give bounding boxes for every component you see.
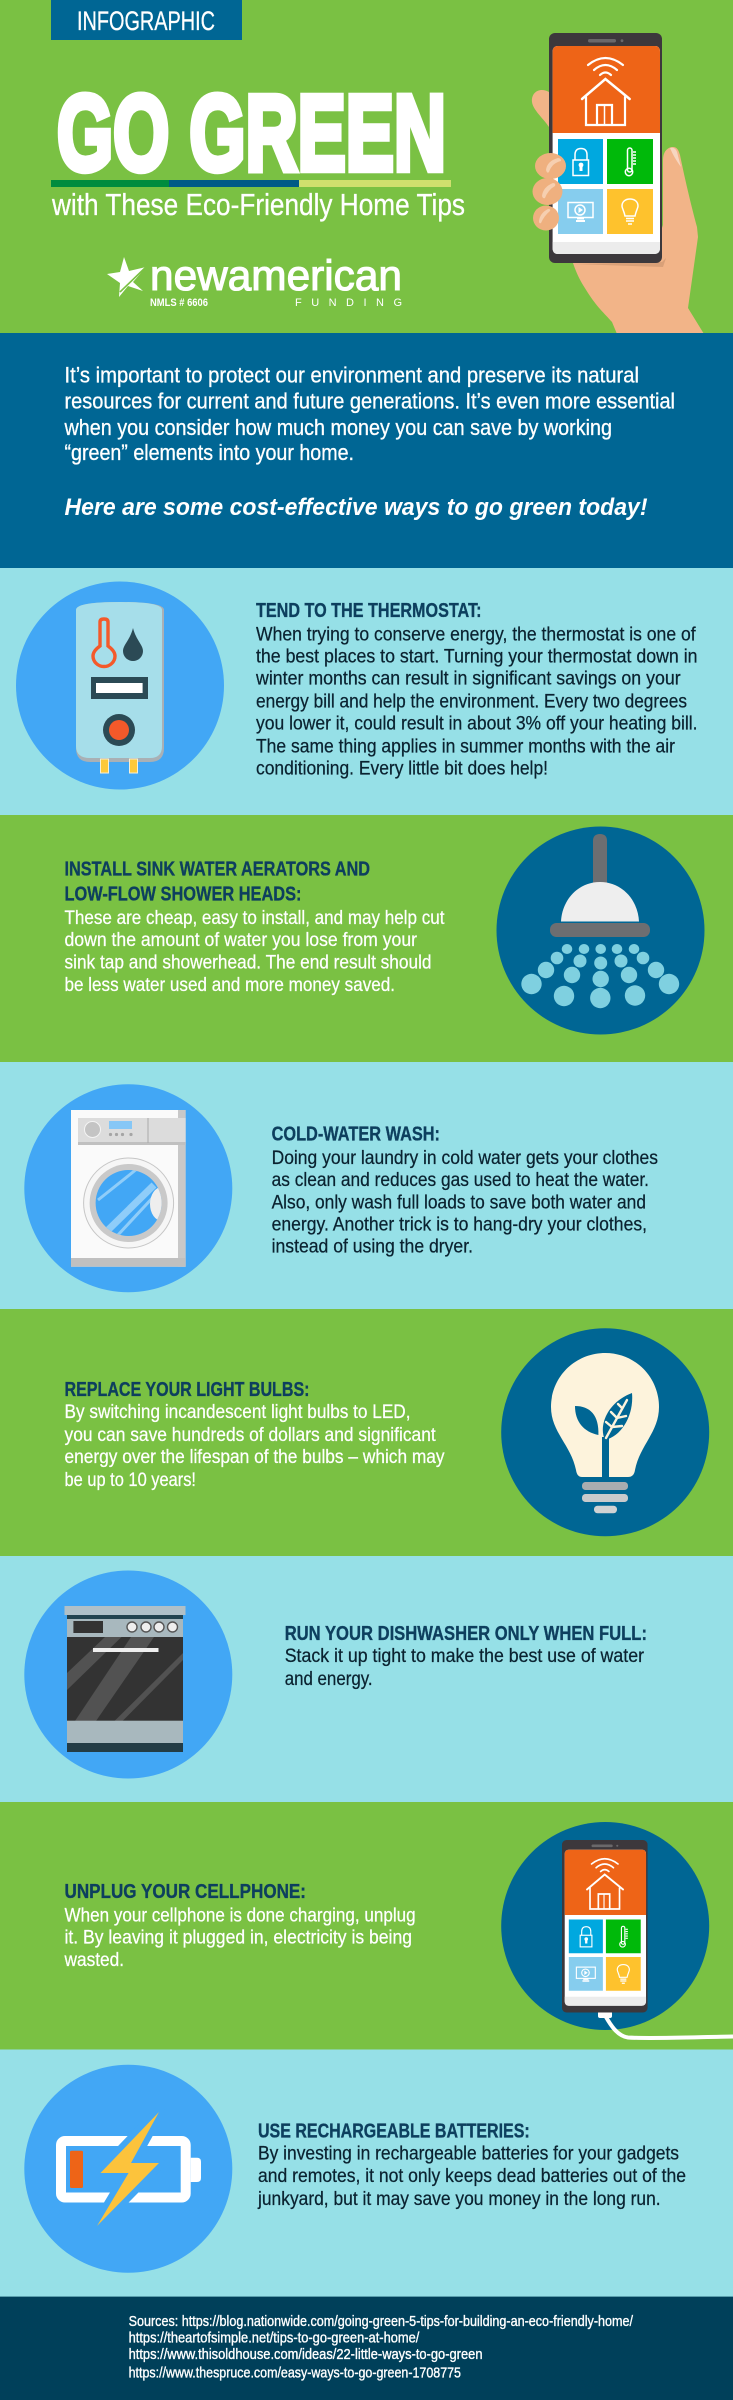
heading	[64, 858, 370, 906]
panel: dishwasher	[0, 1556, 733, 1802]
phone	[549, 33, 662, 263]
panel: sources footer	[0, 2297, 733, 2400]
body text	[272, 1147, 658, 1258]
icon: shower head	[496, 826, 704, 1034]
body text: be up to 10 years!	[64, 1469, 196, 1491]
panel: rechargeable batteries	[0, 2050, 733, 2297]
body text: wasted.	[64, 1949, 124, 1971]
body text: conditioning. Every little bit does help!	[256, 758, 548, 780]
sources text: https://www.thespruce.com/easy-ways-to-go-green-1708775	[129, 2366, 461, 2382]
sources text: Sources: https://blog.nationwide.com/going-green-5-tips-for-building-an-eco-friendly-home/	[129, 2314, 634, 2330]
icon: washing machine	[24, 1084, 232, 1292]
intro text	[64, 363, 675, 465]
intro text: when you consider how much money you can save by working	[64, 415, 612, 440]
body text: energy bill and help the environment. Every two degrees	[256, 691, 687, 713]
intro text: It’s important to protect our environment and preserve its natural	[64, 363, 639, 388]
body text: instead of using the dryer.	[272, 1236, 473, 1258]
body text: and energy.	[285, 1668, 373, 1690]
panel: light bulbs	[0, 1309, 733, 1556]
body text: down the amount of water you lose from your	[64, 929, 417, 951]
icon: water heater thermostat	[16, 582, 224, 790]
sources text: https://www.thisoldhouse.com/ideas/22-little-ways-to-go-green	[129, 2347, 482, 2363]
icon: charging battery	[24, 2065, 232, 2273]
subtitle: with These Eco-Friendly Home Tips	[51, 187, 465, 222]
heading: COLD-WATER WASH:	[272, 1123, 440, 1146]
title underline	[51, 180, 451, 187]
tag: infographic	[51, 0, 242, 40]
panel: cold-water wash	[0, 1062, 733, 1309]
icon: hand holding phone	[532, 33, 704, 334]
intro text: resources for current and future generations. It’s even more essential	[64, 389, 675, 414]
body text	[257, 2143, 686, 2210]
body text: it. By leaving it plugged in, electricity is being	[64, 1927, 412, 1949]
body text	[64, 1401, 445, 1491]
body text: you can save hundreds of dollars and significant	[64, 1424, 436, 1446]
body text: and remotes, it not only keeps dead batteries out of the	[258, 2165, 686, 2187]
body text: sink tap and showerhead. The end result should	[64, 952, 432, 974]
heading: USE RECHARGEABLE BATTERIES:	[258, 2120, 530, 2142]
logo: new american funding: NMLS # 6606	[150, 297, 208, 309]
heading: INSTALL SINK WATER AERATORS AND	[64, 858, 370, 881]
title: GO GREEN	[57, 72, 446, 193]
tag: infographic: INFOGRAPHIC	[77, 6, 215, 36]
body text: the best places to start. Turning your thermostat down in	[256, 646, 698, 668]
body text: junkyard, but it may save you money in the long run.	[257, 2188, 661, 2210]
intro text: “green” elements into your home.	[64, 440, 354, 465]
heading: REPLACE YOUR LIGHT BULBS:	[64, 1378, 310, 1401]
icon: eco light bulb	[501, 1328, 709, 1536]
body text	[255, 624, 698, 780]
body text: energy over the lifespan of the bulbs – which may	[64, 1446, 445, 1468]
heading: UNPLUG YOUR CELLPHONE:	[64, 1880, 306, 1903]
heading: RUN YOUR DISHWASHER ONLY WHEN FULL:	[285, 1622, 647, 1645]
body text: winter months can result in significant savings on your	[255, 668, 681, 690]
icon: phone on charger	[501, 1822, 733, 2038]
logo: new american funding: FUNDING	[295, 297, 402, 309]
fingers	[532, 153, 566, 230]
body text	[64, 907, 445, 996]
body text: When trying to conserve energy, the thermostat is one of	[256, 624, 696, 646]
body text: Also, only wash full loads to save both water and	[272, 1192, 646, 1214]
heading: LOW-FLOW SHOWER HEADS:	[64, 883, 302, 906]
body text: The same thing applies in summer months with the air	[256, 736, 675, 758]
body text: as clean and reduces gas used to heat the water.	[272, 1169, 649, 1191]
panel: thermostat	[0, 568, 733, 815]
panel: introduction	[0, 333, 733, 568]
intro callout: Here are some cost-effective ways to go green today!	[64, 494, 648, 521]
sources text: https://theartofsimple.net/tips-to-go-green-at-home/	[129, 2330, 420, 2346]
body text	[64, 1904, 416, 1971]
icon: dishwasher	[24, 1570, 232, 1778]
sources text	[129, 2314, 634, 2382]
body text: Stack it up tight to make the best use of water	[285, 1645, 644, 1667]
body text: energy. Another trick is to hang-dry your clothes,	[272, 1214, 647, 1236]
body text: These are cheap, easy to install, and may help cut	[64, 907, 445, 929]
heading: TEND TO THE THERMOSTAT:	[256, 599, 482, 622]
body text: By switching incandescent light bulbs to LED,	[64, 1401, 410, 1423]
panel: aerators and shower heads	[0, 815, 733, 1062]
body text: By investing in rechargeable batteries for your gadgets	[258, 2143, 679, 2165]
body text: Doing your laundry in cold water gets your clothes	[272, 1147, 658, 1169]
body text	[285, 1645, 644, 1690]
panel: header	[0, 0, 733, 334]
body text: be less water used and more money saved.	[64, 974, 395, 996]
logo: new american funding: newamerican	[150, 252, 402, 300]
panel: cellphone	[0, 1802, 733, 2050]
body text: When your cellphone is done charging, unplug	[64, 1904, 416, 1926]
